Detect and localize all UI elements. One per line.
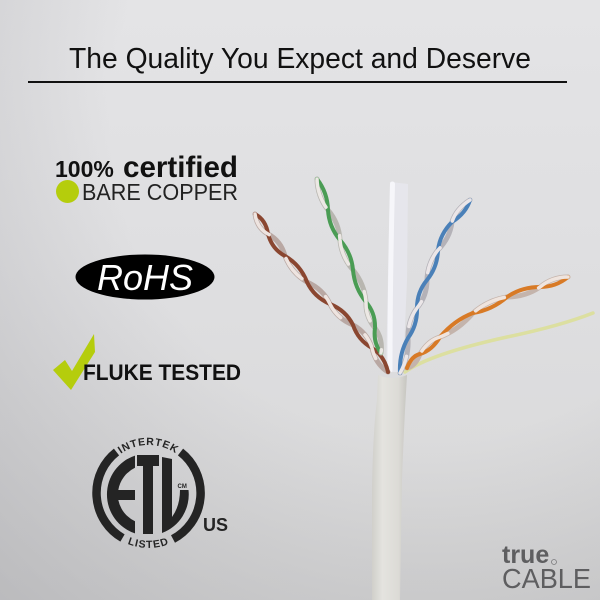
text: fluke tested: FLUKE TESTED	[83, 360, 241, 385]
icon: green dot	[56, 180, 79, 203]
Fluke tested badge	[53, 334, 241, 390]
text: true: true	[502, 541, 549, 569]
title: The Quality You Expect and Deserve	[69, 43, 531, 75]
trueCABLE logo	[502, 541, 591, 594]
registered mark	[552, 560, 556, 564]
wire: yellow	[405, 313, 593, 372]
ellipse	[76, 254, 214, 300]
wire: orange pair	[407, 277, 568, 368]
heading: certified: certified	[123, 151, 238, 184]
text: US: US	[203, 515, 228, 535]
letter L	[162, 457, 189, 533]
icon: check mark	[53, 334, 95, 390]
outer ring	[97, 452, 201, 539]
wire: brown pair	[255, 214, 388, 372]
central spline	[386, 182, 408, 372]
letter E	[107, 456, 135, 533]
title rule	[28, 81, 567, 83]
wire: blue pair	[400, 200, 470, 373]
wire: green pair	[317, 179, 381, 353]
text: bare copper: BARE COPPER	[82, 179, 238, 205]
ETL listed logo	[92, 438, 228, 548]
letter T	[137, 455, 159, 534]
cable illustration	[255, 179, 593, 600]
RoHS badge	[76, 254, 214, 300]
text: Intertek arc: INTERTEK	[118, 438, 179, 454]
cable jacket	[372, 375, 407, 600]
heading: 100%: 100%	[55, 156, 114, 182]
text: CM mark: CM	[178, 484, 187, 490]
certified copper badge	[55, 151, 238, 205]
RoHS label: RoHS	[97, 257, 193, 298]
text: Listed arc: LISTED	[128, 537, 168, 548]
text: CABLE: CABLE	[502, 563, 591, 594]
